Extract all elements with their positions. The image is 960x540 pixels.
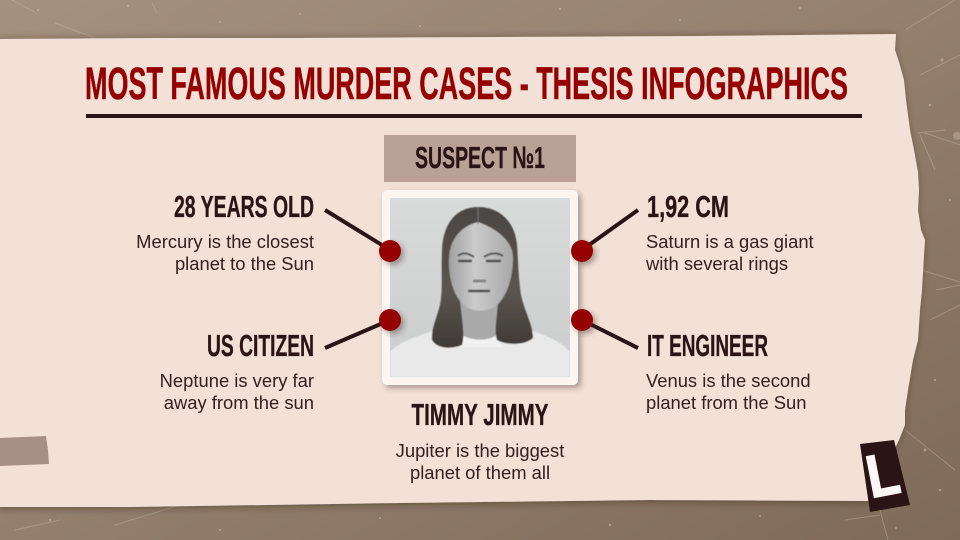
fact: age: [136, 189, 314, 274]
icon: letter L tile: L: [861, 439, 905, 511]
fact: age: Mercury is the closest: [136, 231, 314, 252]
fact: height: [645, 189, 814, 274]
photo: suspect portrait: [390, 198, 570, 377]
fact: citizenship: US CITIZEN: [207, 328, 314, 363]
fact: height: with several rings: [645, 253, 788, 274]
fact: citizenship: [160, 328, 314, 413]
connector lines: [325, 210, 638, 348]
suspect name and description: [396, 397, 564, 483]
pin: top right: [571, 240, 593, 262]
suspect name and description: TIMMY JIMMY: [412, 397, 549, 432]
photo frame: [382, 190, 578, 385]
fact: height: 1,92 CM: [647, 189, 729, 224]
suspect label: [384, 135, 576, 182]
pin: bottom right: [571, 309, 593, 331]
tape strip: [0, 436, 49, 466]
fact: height: Saturn is a gas giant: [646, 231, 814, 252]
fact: age: 28 YEARS OLD: [174, 189, 314, 224]
pin: bottom left: [379, 309, 401, 331]
fact: age: planet to the Sun: [175, 253, 314, 274]
suspect name and description: planet of them all: [410, 462, 550, 483]
fact: job: IT ENGINEER: [647, 328, 768, 363]
fact: job: Venus is the second: [646, 370, 811, 391]
pin: top left: [379, 240, 401, 262]
fact: citizenship: away from the sun: [164, 392, 314, 413]
fact: job: [646, 328, 811, 413]
suspect name and description: Jupiter is the biggest: [396, 440, 564, 461]
fact: job: planet from the Sun: [646, 392, 807, 413]
suspect label: SUSPECT №1: [415, 140, 545, 175]
title underline: [86, 114, 862, 118]
fact: citizenship: Neptune is very far: [160, 370, 314, 391]
